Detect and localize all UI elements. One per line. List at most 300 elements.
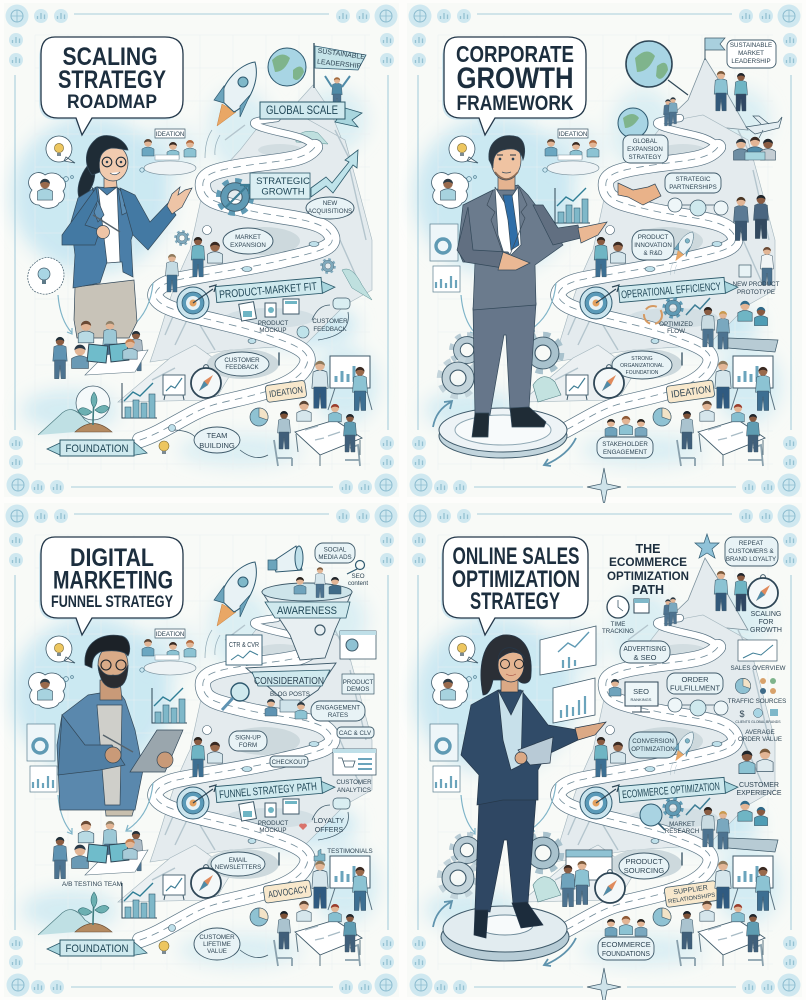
loyalty offers loop: LOYALTY xyxy=(314,818,345,825)
map team xyxy=(734,137,776,160)
seedling xyxy=(38,386,112,435)
label: customer analytics xyxy=(336,779,372,794)
callout: repeat customers and brand loyalty: CUSTOMERS & xyxy=(728,548,774,555)
label: testimonials: TESTIMONIALS xyxy=(327,848,373,855)
callout: market expansion xyxy=(223,228,273,254)
consideration funnel: CONSIDERATION xyxy=(254,675,324,687)
label: scaling for growth: GROWTH xyxy=(750,627,782,634)
label: cac and clv: CAC & CLV xyxy=(339,730,372,737)
callout: engagement rates: RATES xyxy=(328,712,348,719)
platform arrows xyxy=(433,401,576,466)
businessman xyxy=(457,136,607,437)
window: search xyxy=(340,631,376,659)
icon: magnifier xyxy=(222,683,249,710)
banner: ecommerce optimization: ECOMMERCE OPTIMIZATION xyxy=(622,781,720,801)
callout: social media ads: SOCIAL xyxy=(324,546,347,554)
dashboards xyxy=(27,724,57,792)
label: cac and clv xyxy=(337,727,374,738)
mini metrics xyxy=(735,708,781,724)
label: seo content: SEO xyxy=(351,573,365,580)
icon: target xyxy=(177,285,216,319)
callout: new acquisitions: NEW xyxy=(323,200,337,207)
flag: sustainable leadership xyxy=(314,43,366,88)
icon: small gears xyxy=(175,231,335,273)
icon: thumbs up xyxy=(314,849,325,861)
label: scaling for growth xyxy=(750,611,782,634)
callout: product innovation: & R&D xyxy=(644,250,663,257)
icon: airplane xyxy=(746,116,782,138)
heading: ecommerce optimization path: ECOMMERCE xyxy=(609,555,687,569)
banner: foundation xyxy=(47,440,147,456)
consideration funnel xyxy=(246,663,336,708)
callout: stakeholder engagement: STAKEHOLDER xyxy=(602,441,648,448)
label: time tracking: TIME xyxy=(611,621,625,628)
whiteboard presenters xyxy=(312,356,372,411)
callout: product innovation: PRODUCT xyxy=(638,234,669,241)
callout: sustainable market leadership: MARKET xyxy=(738,50,764,57)
thought icons xyxy=(432,136,478,208)
people group xyxy=(594,726,626,777)
callout: order fulfillment xyxy=(667,673,723,694)
whiteboard presenters xyxy=(312,856,372,911)
label: market research: MARKET xyxy=(669,821,695,828)
callout: ecommerce foundations: ECOMMERCE xyxy=(601,940,651,949)
banner: strategic growth: STRATEGIC xyxy=(256,176,310,187)
sticky: supplier relationships: RELATIONSHIPS xyxy=(668,893,716,905)
callout: sustainable market leadership: LEADERSHIP xyxy=(731,58,771,65)
heading: ecommerce optimization path xyxy=(607,542,689,597)
mini metrics: CLIENTS GLOBAL BRANDS xyxy=(735,720,781,724)
callout: order fulfillment: FULFILLMENT xyxy=(670,686,721,692)
connected icons xyxy=(668,198,728,216)
bar chart xyxy=(122,883,157,918)
label: optimized flow: OPTIMIZED xyxy=(659,321,693,328)
compass rose xyxy=(583,968,627,1000)
shrub xyxy=(533,377,561,402)
callout: strong organizational foundation: ORGANIZATIONAL xyxy=(620,363,664,369)
banner: foundation: FOUNDATION xyxy=(66,943,129,955)
banner: operational efficiency: OPERATIONAL EFFICIENCY xyxy=(621,281,722,301)
pie chart xyxy=(250,408,268,426)
title speech bubble: OPTIMIZATION xyxy=(452,566,580,593)
lab scientist xyxy=(739,247,774,285)
presenter woman xyxy=(62,135,192,338)
label: product demos xyxy=(342,674,374,694)
title speech bubble xyxy=(39,537,183,637)
whiteboard presenters xyxy=(715,856,775,911)
ideation scene: IDEATION xyxy=(559,131,587,138)
chart board xyxy=(163,375,185,400)
label: average order value: AVERAGE xyxy=(745,729,775,736)
loyalty offers loop xyxy=(299,798,350,840)
callout: customer lifetime value: LIFETIME xyxy=(203,941,231,948)
label: optimized flow xyxy=(659,321,693,335)
callout: conversion optimization: OPTIMIZATION xyxy=(631,746,675,753)
callout: repeat customers and brand loyalty: REPEAT xyxy=(739,540,763,547)
customer feedback loop xyxy=(297,298,350,340)
icon: idea bulb cloud xyxy=(28,258,64,294)
callout: email newsletters xyxy=(211,852,265,876)
icon: rocket xyxy=(205,62,256,158)
icon: target xyxy=(177,785,216,819)
callout: ecommerce foundations: FOUNDATIONS xyxy=(602,951,650,958)
traffic sources: TRAFFIC SOURCES xyxy=(728,698,786,705)
bar chart xyxy=(122,383,157,418)
traffic sources xyxy=(728,678,786,705)
panel: corporate growth framework xyxy=(407,3,802,506)
callout: team building: TEAM xyxy=(207,431,227,440)
label: customer experience: CUSTOMER xyxy=(739,782,779,789)
meeting table xyxy=(677,901,765,966)
blog team xyxy=(265,699,307,719)
banner: foundation xyxy=(47,940,147,956)
label: seo content xyxy=(347,560,368,587)
curved arrows xyxy=(461,283,556,334)
banner: strategic growth xyxy=(250,173,310,199)
bar chart xyxy=(152,688,187,723)
factory team xyxy=(701,801,778,852)
thought icons xyxy=(29,136,75,208)
platform arrows xyxy=(433,901,576,966)
customer feedback loop: FEEDBACK xyxy=(313,326,348,333)
banner: funnel strategy path: FUNNEL STRATEGY PATH xyxy=(219,781,317,801)
callout: strong organizational foundation: STRONG xyxy=(631,356,653,362)
customer feedback loop: CUSTOMER xyxy=(312,318,348,325)
ideation scene: IDEATION xyxy=(156,631,184,638)
callout: customer lifetime value: VALUE xyxy=(207,948,227,955)
icon: compass xyxy=(191,365,221,398)
title speech bubble: FRAMEWORK xyxy=(456,92,574,115)
callout: team building xyxy=(168,424,268,458)
sticky: supplier relationships: SUPPLIER xyxy=(673,885,708,896)
callout: product sourcing: SOURCING xyxy=(624,866,664,875)
callout: email newsletters: EMAIL xyxy=(229,857,248,864)
callout: global expansion strategy: EXPANSION xyxy=(627,146,663,153)
icon: target xyxy=(580,285,619,319)
icon: compass xyxy=(595,870,625,903)
floating dashboard screens xyxy=(540,626,596,723)
icon: small rocket xyxy=(670,732,693,775)
icon: compass xyxy=(594,365,624,398)
label: seo content: content xyxy=(348,580,368,587)
label: market research xyxy=(665,821,699,835)
curved arrows xyxy=(461,783,556,834)
callout: repeat customers and brand loyalty: BRAND LOYALTY xyxy=(726,556,776,563)
callout: strategic partnerships xyxy=(665,173,721,193)
callout: product sourcing xyxy=(619,853,669,879)
callout: new acquisitions xyxy=(306,197,354,219)
callout: sustainable market leadership xyxy=(727,40,776,68)
panel: digital marketing funnel strategy xyxy=(4,503,399,997)
callout: strategic partnerships: STRATEGIC xyxy=(676,176,711,183)
shrub xyxy=(533,877,561,902)
callout: sign-up form xyxy=(229,731,267,751)
callout: checkout xyxy=(270,756,308,767)
title speech bubble: FUNNEL STRATEGY xyxy=(51,592,173,611)
process icons xyxy=(644,298,710,324)
label: customer experience: EXPERIENCE xyxy=(736,790,782,797)
callout: repeat customers and brand loyalty xyxy=(725,537,778,566)
sales overview chart xyxy=(731,640,786,672)
title speech bubble: DIGITAL xyxy=(70,544,154,572)
loyalty offers loop: OFFERS xyxy=(315,827,344,834)
callout: social media ads: MEDIA ADS xyxy=(318,554,352,561)
man with tablet xyxy=(57,635,183,816)
icon: clock xyxy=(607,596,629,618)
label: market research: RESEARCH xyxy=(665,828,699,835)
title speech bubble: ROADMAP xyxy=(67,92,157,113)
flag: sustainable leadership: SUSTAINABLE xyxy=(317,48,366,61)
label: time tracking: TRACKING xyxy=(602,628,634,635)
callout: order fulfillment: ORDER xyxy=(681,675,709,684)
icon: target xyxy=(580,785,619,819)
ideation scene xyxy=(140,629,196,675)
callout: advertising and seo: ADVERTISING xyxy=(624,646,666,653)
analytics window xyxy=(333,749,376,775)
mini metrics: $ xyxy=(739,709,745,719)
connected icons xyxy=(668,698,728,716)
label: time tracking xyxy=(602,621,634,635)
label: customer experience xyxy=(736,782,782,797)
sticky: ideation xyxy=(265,380,307,403)
banner: global scale xyxy=(260,102,362,127)
callout: customer lifetime value: CUSTOMER xyxy=(199,934,235,941)
team at computers xyxy=(53,321,148,379)
title speech bubble: MARKETING xyxy=(53,566,173,594)
meeting table xyxy=(274,901,362,966)
product mockup icons xyxy=(239,799,299,834)
pie chart xyxy=(250,908,268,926)
title speech bubble xyxy=(39,37,183,137)
thought icons xyxy=(432,636,478,708)
icon: rocket xyxy=(205,562,256,658)
bushes xyxy=(296,131,372,300)
gears xyxy=(440,835,561,896)
whiteboard presenters xyxy=(715,356,775,411)
label: scaling for growth: SCALING xyxy=(751,611,781,618)
gears xyxy=(440,335,561,396)
callout: product innovation xyxy=(632,230,674,260)
research icons xyxy=(640,798,710,830)
banner: global scale: GLOBAL SCALE xyxy=(266,103,338,117)
banner: product-market fit: PRODUCT-MARKET FIT xyxy=(219,281,318,301)
label: product demos: PRODUCT xyxy=(343,679,374,686)
sticky: advocacy xyxy=(263,880,312,903)
winding road xyxy=(543,118,735,440)
label: customer analytics: CUSTOMER xyxy=(336,779,372,786)
consideration funnel: BLOG POSTS xyxy=(270,691,310,698)
callout: conversion optimization: CONVERSION xyxy=(632,738,674,745)
window: ctr and cvr: CTR & CVR xyxy=(229,640,259,649)
gear platform xyxy=(441,906,569,961)
panel: scaling strategy roadmap xyxy=(4,3,399,497)
meeting table xyxy=(274,401,362,466)
stakeholder group xyxy=(605,916,647,936)
product mockup icons: MOCKUP xyxy=(259,827,287,834)
callout: engagement rates: ENGAGEMENT xyxy=(316,704,360,712)
label: average order value: ORDER VALUE xyxy=(738,736,782,743)
callout: sign-up form: FORM xyxy=(239,742,257,749)
people group xyxy=(191,726,222,777)
callout: product innovation: INNOVATION xyxy=(634,242,672,249)
title speech bubble: SCALING xyxy=(62,43,158,71)
flag xyxy=(705,38,725,60)
icon: bulb xyxy=(159,441,169,454)
heading: ecommerce optimization path: PATH xyxy=(632,583,664,597)
sticky: supplier relationships xyxy=(664,880,718,908)
pie chart xyxy=(653,908,671,926)
curved arrows xyxy=(58,283,153,334)
title speech bubble: STRATEGY xyxy=(58,66,166,94)
title speech bubble: CORPORATE xyxy=(456,41,574,67)
magnified globe xyxy=(626,41,688,95)
product mockup icons: MOCKUP xyxy=(259,327,287,334)
people group xyxy=(594,226,626,277)
flag: sustainable leadership: LEADERSHIP xyxy=(317,59,362,70)
sticky: ideation: IDEATION xyxy=(268,385,304,399)
pie chart xyxy=(653,408,671,426)
mountain peak xyxy=(665,558,748,630)
awareness funnel: AWARENESS xyxy=(277,605,337,617)
callout: market expansion: MARKET xyxy=(235,234,261,241)
callout: customer feedback: CUSTOMER xyxy=(224,357,260,364)
callout: checkout: CHECKOUT xyxy=(272,759,307,766)
handshake businessmen xyxy=(734,195,768,241)
callout: stakeholder engagement xyxy=(597,437,653,458)
callout: social media ads xyxy=(315,543,355,563)
label: a/b testing team: A/B TESTING TEAM xyxy=(62,881,122,888)
title speech bubble: ONLINE SALES xyxy=(452,543,580,570)
gear platform xyxy=(439,408,567,458)
callout: stakeholder engagement: ENGAGEMENT xyxy=(603,449,647,456)
awareness funnel xyxy=(262,567,352,660)
callout: sustainable market leadership: SUSTAINABLE xyxy=(730,42,772,49)
callout: customer feedback xyxy=(215,352,269,376)
window: ctr and cvr xyxy=(226,635,262,665)
label: new product prototype: PROTOTYPE xyxy=(737,289,775,296)
dashboards xyxy=(430,724,460,792)
thought icons xyxy=(29,636,75,708)
person: summit cheering xyxy=(325,76,350,108)
mountain xyxy=(262,85,352,165)
dashboards xyxy=(430,224,460,292)
seedling xyxy=(38,892,112,935)
icon: bulb xyxy=(159,941,169,954)
winding road xyxy=(140,118,332,440)
sticky: ideation xyxy=(666,380,715,403)
title speech bubble xyxy=(442,37,586,137)
title speech bubble xyxy=(441,537,588,637)
chart board xyxy=(566,375,588,400)
label: scaling for growth: FOR xyxy=(759,619,773,626)
chart board xyxy=(163,875,185,900)
icon: calendar xyxy=(634,599,649,613)
title speech bubble: STRATEGY xyxy=(470,588,560,615)
icon: handshake xyxy=(618,183,661,205)
callout: conversion optimization xyxy=(629,732,677,758)
callout: ecommerce foundations xyxy=(598,937,654,960)
icon: gear growth xyxy=(219,181,251,213)
support agents xyxy=(739,749,773,774)
label: new product prototype xyxy=(733,281,780,296)
team at computers xyxy=(53,821,148,879)
callout: engagement rates xyxy=(311,701,365,721)
callout: global expansion strategy xyxy=(623,135,668,163)
curved arrows xyxy=(58,783,153,834)
sticky: ideation: IDEATION xyxy=(670,384,712,401)
bar chart xyxy=(555,188,590,223)
factory team xyxy=(701,301,778,352)
businesswoman xyxy=(461,635,606,938)
label: customer analytics: ANALYTICS xyxy=(337,787,371,794)
callout: sign-up form: SIGN-UP xyxy=(235,734,261,742)
icon: compass xyxy=(191,865,221,898)
callout: customer feedback: FEEDBACK xyxy=(225,364,260,371)
product mockup icons xyxy=(239,299,299,334)
product mockup icons: PRODUCT xyxy=(258,320,289,327)
window: seo rankings: RANKINGS xyxy=(631,697,652,702)
icon: megaphone xyxy=(268,546,303,572)
callout: advertising and seo xyxy=(620,641,670,663)
sticky: advocacy: ADVOCACY xyxy=(267,884,309,901)
heading: ecommerce optimization path: THE xyxy=(636,542,660,556)
callout: product sourcing: PRODUCT xyxy=(625,857,663,866)
window: seo rankings xyxy=(609,679,658,712)
callout: market expansion: EXPANSION xyxy=(230,242,266,249)
icon: small globe xyxy=(618,108,648,138)
callout: team building: BUILDING xyxy=(199,441,235,450)
callout: new acquisitions: ACQUISITIONS xyxy=(308,208,352,215)
shop scene xyxy=(561,850,612,907)
ideation scene xyxy=(140,129,196,175)
callout: global expansion strategy: STRATEGY xyxy=(629,154,661,161)
winding road xyxy=(543,618,735,940)
callout: customer lifetime value xyxy=(168,924,268,960)
icon: globe xyxy=(268,48,306,86)
title speech bubble: GROWTH xyxy=(456,62,574,95)
mountain peak xyxy=(665,58,748,130)
label: average order value xyxy=(738,729,782,743)
stakeholder group xyxy=(605,416,647,436)
summit people xyxy=(663,571,748,626)
summit people xyxy=(663,71,748,126)
callout: strong organizational foundation xyxy=(612,351,672,379)
icon: star xyxy=(695,534,719,558)
arrow: growth xyxy=(311,150,358,197)
label: optimized flow: FLOW xyxy=(667,328,685,335)
icon: compass xyxy=(748,575,778,608)
label: product demos: DEMOS xyxy=(347,686,369,693)
callout: global expansion strategy: GLOBAL xyxy=(633,138,658,145)
winding road xyxy=(140,618,332,940)
callout: strategic partnerships: PARTNERSHIPS xyxy=(669,184,717,191)
callout: advertising and seo: & SEO xyxy=(634,653,657,662)
banner: foundation: FOUNDATION xyxy=(66,443,129,455)
ideation scene xyxy=(543,129,599,175)
label: new product prototype: NEW PRODUCT xyxy=(733,281,780,288)
icon: small rocket xyxy=(670,232,693,275)
panel: online sales optimization strategy xyxy=(407,503,802,1000)
compass rose xyxy=(583,468,627,506)
heading: ecommerce optimization path: OPTIMIZATION xyxy=(607,569,689,583)
people group xyxy=(166,226,222,292)
meeting table xyxy=(677,401,765,466)
product mockup icons: PRODUCT xyxy=(258,820,289,827)
window: seo rankings: SEO xyxy=(633,687,649,696)
ideation scene: IDEATION xyxy=(156,131,184,138)
sales overview chart: SALES OVERVIEW xyxy=(731,665,786,672)
callout: email newsletters: NEWSLETTERS xyxy=(215,864,261,871)
